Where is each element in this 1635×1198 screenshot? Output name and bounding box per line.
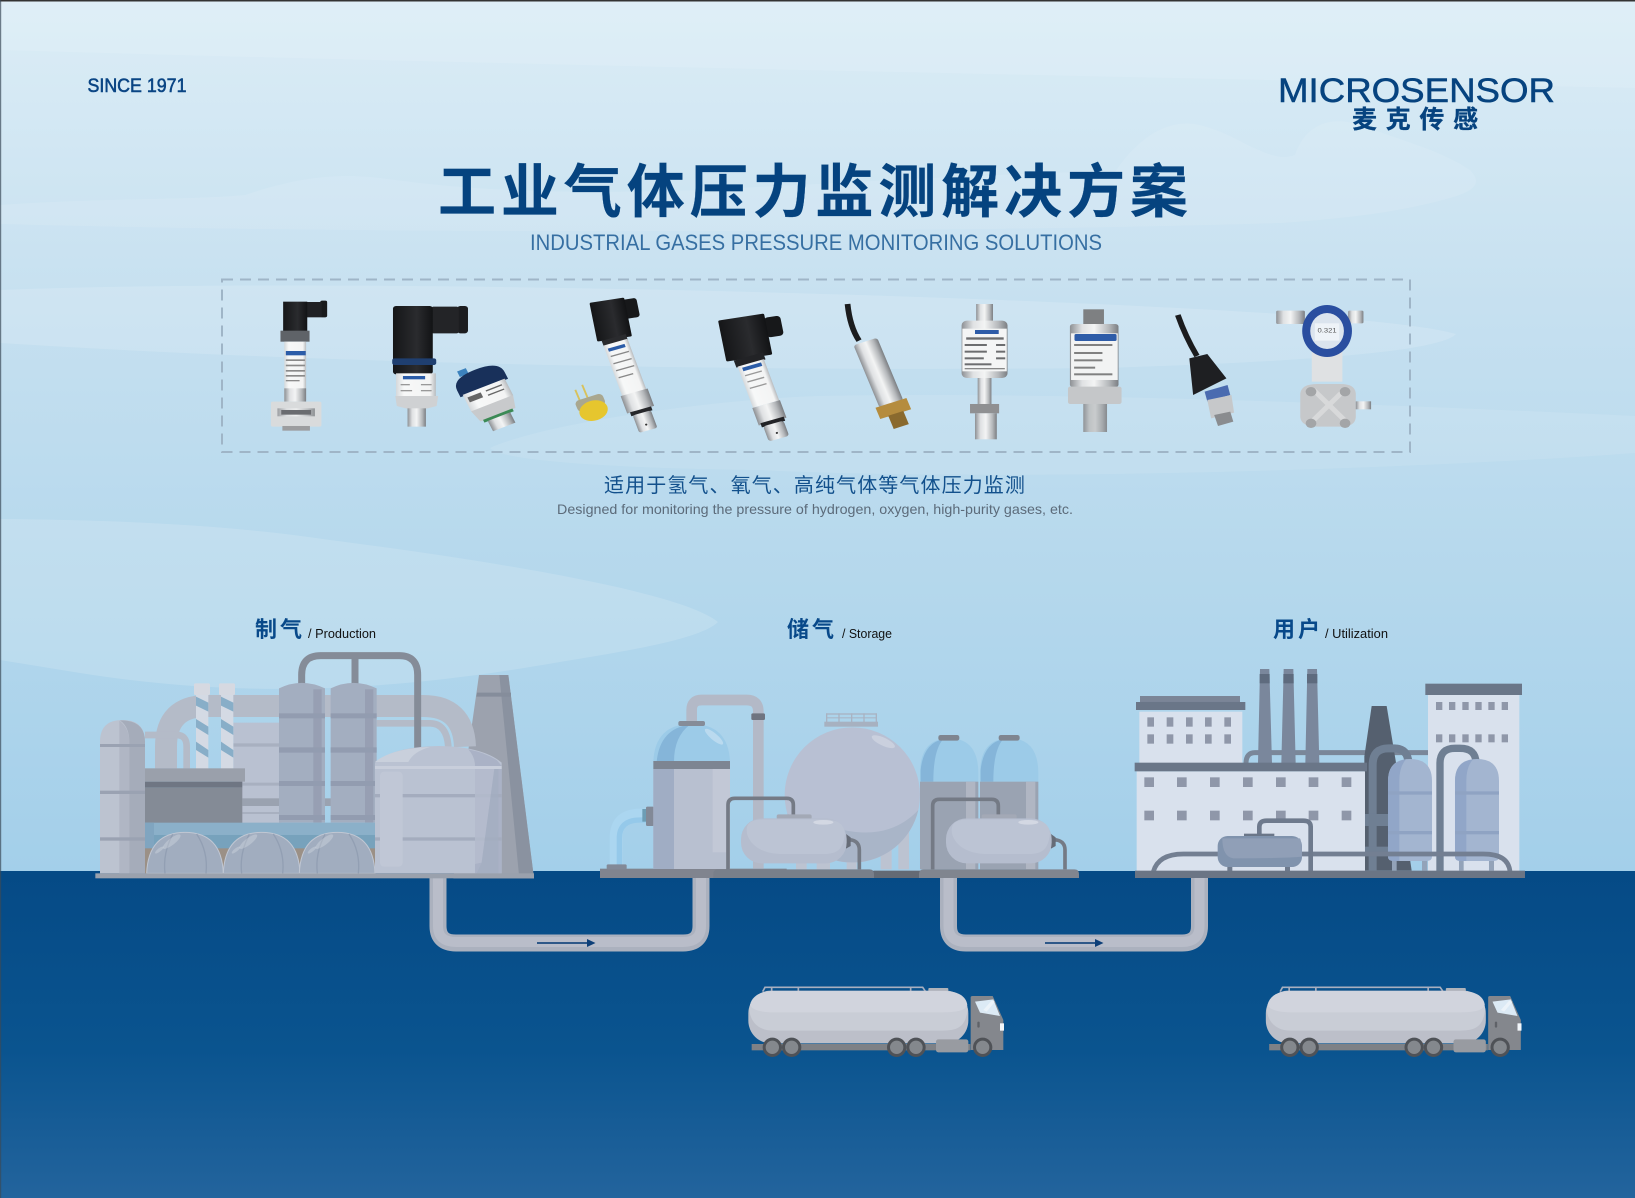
ground slab <box>95 873 534 878</box>
heading: utilization: 用户 <box>1273 617 1323 642</box>
tank <box>1266 991 1486 1043</box>
sensor 3: small <box>449 356 528 436</box>
truck 1 <box>748 987 1004 1057</box>
background pipes <box>145 706 465 768</box>
background building <box>233 723 331 823</box>
chassis <box>752 1044 970 1050</box>
grey box <box>145 768 245 823</box>
striped chimneys <box>194 683 235 769</box>
logo: microsensor: 麦克传感 <box>1352 105 1487 134</box>
products row <box>271 290 1371 445</box>
rail <box>763 987 926 992</box>
bottom pipe run <box>1153 854 1510 872</box>
illustration: storage station <box>600 700 1079 878</box>
text: chinese caption: 适用于氢气、氧气、高纯气体等气体压力监测 <box>604 474 1026 497</box>
sphere tank <box>785 713 920 869</box>
wheels <box>1280 1038 1510 1057</box>
right tanks <box>920 735 1038 869</box>
tank <box>748 991 968 1043</box>
heading: utilization <box>1273 617 1388 642</box>
heading: storage: 储气 <box>787 617 837 642</box>
heading: production: / Production <box>308 627 376 641</box>
base slabs <box>600 869 920 878</box>
truck 2 <box>1266 987 1521 1057</box>
chimney <box>453 675 534 878</box>
arrow: flow 1 <box>537 939 596 947</box>
horizontal tank left <box>728 798 859 869</box>
ground slab <box>1135 871 1525 878</box>
products: left group <box>271 290 821 445</box>
dark chimney <box>1364 706 1412 871</box>
blue inlet pipe <box>607 807 654 869</box>
three chimneys <box>1258 669 1319 763</box>
domes <box>147 832 375 873</box>
cab <box>971 996 1004 1050</box>
big storage tank <box>375 746 502 873</box>
logo: microsensor: MICROSENSOR <box>1278 72 1555 110</box>
pipe: storage to utilization <box>948 878 1200 943</box>
sensor 9 <box>1178 315 1234 426</box>
text: since 1971: SINCE 1971 <box>88 76 186 97</box>
text: english caption: Designed for monitoring the pressure of hydrogen, oxygen, high-purity gases, etc. <box>557 501 1073 517</box>
illustration: end user factory <box>1135 669 1525 878</box>
logo: microsensor <box>1278 72 1555 134</box>
heading: production <box>255 617 376 642</box>
pipe: production to storage <box>438 878 701 943</box>
vertical tanks <box>1388 759 1499 871</box>
panel: product dashed frame <box>222 280 1410 452</box>
pipe to tower <box>692 700 765 869</box>
illustration: production plant <box>95 656 534 878</box>
main building <box>1135 763 1367 871</box>
sensor 1 <box>271 301 327 431</box>
sensor 10: transmitter: 0.321 <box>1318 327 1337 335</box>
sensor 2 <box>392 306 468 427</box>
heading: production: 制气 <box>255 617 305 642</box>
title: 工业气体压力监测解决方案 <box>438 160 1193 225</box>
sensor 10: transmitter <box>1276 305 1371 428</box>
sensor 7 <box>962 304 1008 439</box>
wheels <box>763 1038 992 1057</box>
sensor chip: yellow <box>569 380 611 424</box>
rail <box>1280 987 1443 992</box>
twin towers <box>279 683 377 823</box>
left tower <box>653 721 730 869</box>
top pipe <box>302 656 418 748</box>
right tall building <box>1425 684 1522 872</box>
sensor 6 <box>848 304 916 432</box>
products: right group <box>848 304 1371 439</box>
sensor 8 <box>1068 309 1122 432</box>
sea ground <box>0 871 1635 1198</box>
horizontal tank right <box>933 799 1065 869</box>
arrow: flow 2 <box>1045 939 1104 947</box>
small pressure tank <box>1218 821 1311 871</box>
heading: storage: / Storage <box>842 627 892 641</box>
chassis <box>1269 1044 1488 1050</box>
sensor 5 <box>712 304 821 445</box>
background pipe <box>1246 753 1428 763</box>
subtitle: INDUSTRIAL GASES PRESSURE MONITORING SOLUTIONS <box>530 230 1102 255</box>
base slabs front <box>713 869 1079 878</box>
cab <box>1488 996 1521 1050</box>
water tank band <box>145 823 376 874</box>
sensor 4 <box>583 290 682 435</box>
riser pipes <box>1365 748 1476 875</box>
upper left building <box>1136 696 1245 763</box>
heading: storage <box>787 617 892 642</box>
left column <box>100 720 145 873</box>
heading: utilization: / Utilization <box>1325 627 1388 641</box>
